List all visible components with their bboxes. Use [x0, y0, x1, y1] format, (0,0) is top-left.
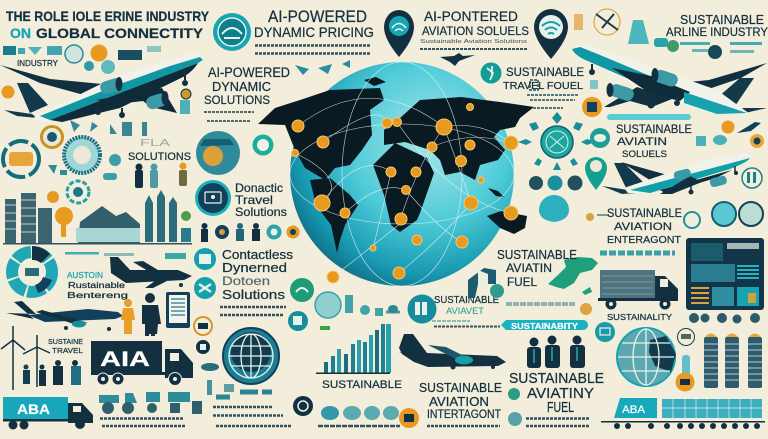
icons: right scatter [539, 120, 764, 228]
globe [258, 62, 534, 286]
route nodes [292, 104, 518, 283]
icon: donactic travel badge [195, 180, 231, 216]
icon scatter above globe [180, 60, 350, 114]
icon row: people and badges [201, 223, 300, 242]
truck: AIA: AIA [100, 348, 150, 371]
people: bottom left group [23, 360, 81, 386]
train: ABA [601, 398, 765, 429]
label: sustaine travel: TRAVEL [52, 348, 83, 355]
label: austoin sustainable: Bentereng [67, 291, 128, 300]
airplane: large top right [572, 44, 767, 114]
heading: sustainable aviation intertagont [419, 381, 502, 426]
pill: sustainability [501, 320, 588, 331]
heading: sustainable aviatin fuel: AVIATIN [506, 263, 552, 275]
train: ABA: ABA [622, 404, 646, 416]
heading: contactless dynerned solutions: Contactless [222, 248, 293, 262]
heading: AI-powered dynamic solutions: SOLUTIONS [204, 93, 270, 107]
heading: contactless dynerned solutions: Solutions [222, 288, 285, 302]
icons: contactless badges [194, 248, 383, 371]
heading: sustainable aviatin fuel [497, 248, 592, 315]
icon row: top left [2, 44, 161, 98]
heading: donactic travel solutions [235, 181, 287, 219]
icons near globe edge [468, 268, 504, 298]
heading: sustainable aviatin fuel: SUSTAINABLE [497, 248, 577, 262]
label: austoin sustainable [65, 252, 186, 300]
heading: sustainable travel fouel: TRAVEL FOUEL [503, 80, 583, 92]
heading: sustainable aviatin fuel: FUEL [507, 277, 538, 289]
panel: dashboard [686, 238, 764, 310]
heading: sustainable travel fouel: SUSTAINABLE [506, 67, 584, 79]
truck: ABA: ABA [17, 401, 50, 417]
pill: sustainability: SUSTAINABITY [511, 321, 578, 331]
heading: sustainable aviation intertagont: INTERTAGONT [427, 409, 501, 421]
panel: sustainable aviavet [386, 294, 500, 326]
icon rings: left [3, 126, 274, 203]
label: sustainable (bar chart): SUSTAINABLE [322, 379, 402, 391]
heading: sustainable aviatiny fuel [508, 371, 604, 426]
panel: sustainable aviavet: AVIAVET [446, 306, 485, 316]
heading: contactless dynerned solutions [220, 248, 293, 315]
icon: globe right [617, 328, 676, 386]
heading: sustainable aviatin soluels: SUSTAINABLE [616, 124, 692, 136]
heading: contactless dynerned solutions: Dynerned [222, 261, 287, 275]
heading: sustainable aviatin soluels: AVIATIN [617, 136, 667, 148]
heading: sustainable airline industry [666, 12, 768, 39]
ocean [290, 62, 514, 286]
people: three figures [527, 336, 585, 368]
heading: AI-pontered aviation soluels [420, 8, 529, 49]
icons: fuel tanks [704, 334, 762, 388]
icon: green map [548, 257, 598, 295]
heading: AI-powered dynamic solutions: AI-POWERED [208, 65, 290, 80]
title [6, 8, 210, 41]
label: solutions: FLA [140, 138, 171, 149]
heading: sustainable aviation enteragont [600, 208, 682, 253]
heading: sustainable aviation intertagont: AVIATION [429, 395, 489, 409]
icon: teal badge right [595, 322, 694, 392]
truck: right middle [598, 270, 678, 310]
heading: sustainable travel fouel [503, 67, 584, 92]
people: orange and black figures [121, 293, 161, 336]
heading: sustainable aviatiny fuel: AVIATINY [527, 386, 594, 402]
icon: document [166, 292, 190, 328]
title: THE ROLE IOLE ERINE INDUSTRY [6, 8, 210, 24]
continents [258, 77, 534, 253]
heading: AI-powered dynamic pricing [254, 7, 374, 54]
icon: teal bar [607, 114, 691, 120]
chart: rising bars [316, 324, 391, 374]
icon: globe lower left [223, 328, 279, 384]
icon: skyline [3, 190, 192, 244]
heading: AI-powered dynamic pricing: AI-POWERED [268, 7, 367, 26]
icons: bottom centre [293, 396, 419, 428]
heading: sustainable airline industry: SUSTAINABLE [680, 12, 764, 27]
heading: sustainable aviation enteragont: ENTERAGONT [607, 235, 681, 246]
truck: ABA [3, 397, 93, 430]
airplane: bottom centre [399, 334, 506, 370]
heading: AI-pontered aviation soluels: AVIATION SOLUELS [422, 24, 529, 38]
label: solutions [128, 138, 191, 163]
heading: AI-pontered aviation soluels: AI-PONTERED [424, 8, 518, 24]
heading: sustainable aviation intertagont: SUSTAINABLE [419, 381, 502, 395]
heading: AI-powered dynamic solutions [204, 65, 290, 121]
heading: donactic travel solutions: Donactic [235, 181, 283, 195]
label: industry: INDUSTRY [17, 59, 59, 68]
icons: wind turbines [1, 326, 50, 390]
label: austoin sustainable: AUSTOIN [67, 271, 103, 280]
heading: AI-pontered aviation soluels: Sustainable Aviation Solutions [420, 39, 528, 45]
label: sustainality: SUSTAINALITY [607, 312, 672, 322]
heading: sustainable aviatiny fuel: FUEL [547, 400, 574, 416]
panel: sustainable aviavet: SUSTAINABLE [434, 295, 499, 306]
icons: dashboard row [689, 313, 760, 324]
icon: location pin 1 [384, 10, 414, 57]
heading: sustainable aviatin soluels [616, 124, 692, 160]
title: ON [10, 25, 31, 41]
heading: sustainable aviation enteragont: SUSTAINABLE [607, 208, 682, 220]
people and small icons: left middle [48, 120, 187, 188]
title: GLOBAL CONNECTITY [36, 25, 204, 41]
icon: badge top [213, 13, 251, 51]
heading: sustainable aviation enteragont: AVIATION [614, 221, 672, 233]
label: sustaine travel [48, 339, 83, 355]
heading: AI-powered dynamic solutions: DYNAMIC [212, 80, 271, 94]
heading: AI-powered dynamic pricing: DYNAMIC PRICING [254, 24, 374, 40]
chart: segmented ring [12, 246, 52, 293]
icon: sustainable travel fouel badge [480, 62, 502, 84]
icon: location pin 2 [534, 9, 568, 59]
airplane: small left lower [6, 301, 123, 331]
label: sustaine travel: SUSTAINE [48, 339, 83, 346]
airplane: small left upper [110, 257, 192, 288]
heading: sustainable airline industry: ARLINE INDUSTRY [666, 27, 768, 39]
flight routes [290, 62, 514, 286]
heading: sustainable aviatiny fuel: SUSTAINABLE [509, 371, 604, 387]
airplane: large top left [0, 54, 203, 122]
truck: AIA [91, 341, 193, 386]
icons and text: lower centre-left [99, 380, 292, 426]
label: austoin sustainable: Rustainable [68, 281, 126, 290]
heading: donactic travel solutions: Solutions [235, 205, 287, 219]
icon cluster: top right [574, 9, 762, 59]
heading: sustainable aviatin soluels: SOLUELS [622, 149, 667, 160]
heading: donactic travel solutions: Travel [235, 193, 273, 207]
airplane: mid right [602, 153, 751, 194]
icon cluster: right middle [440, 53, 610, 190]
label: solutions: SOLUTIONS [128, 151, 191, 163]
heading: contactless dynerned solutions: Dotoen [222, 274, 270, 288]
